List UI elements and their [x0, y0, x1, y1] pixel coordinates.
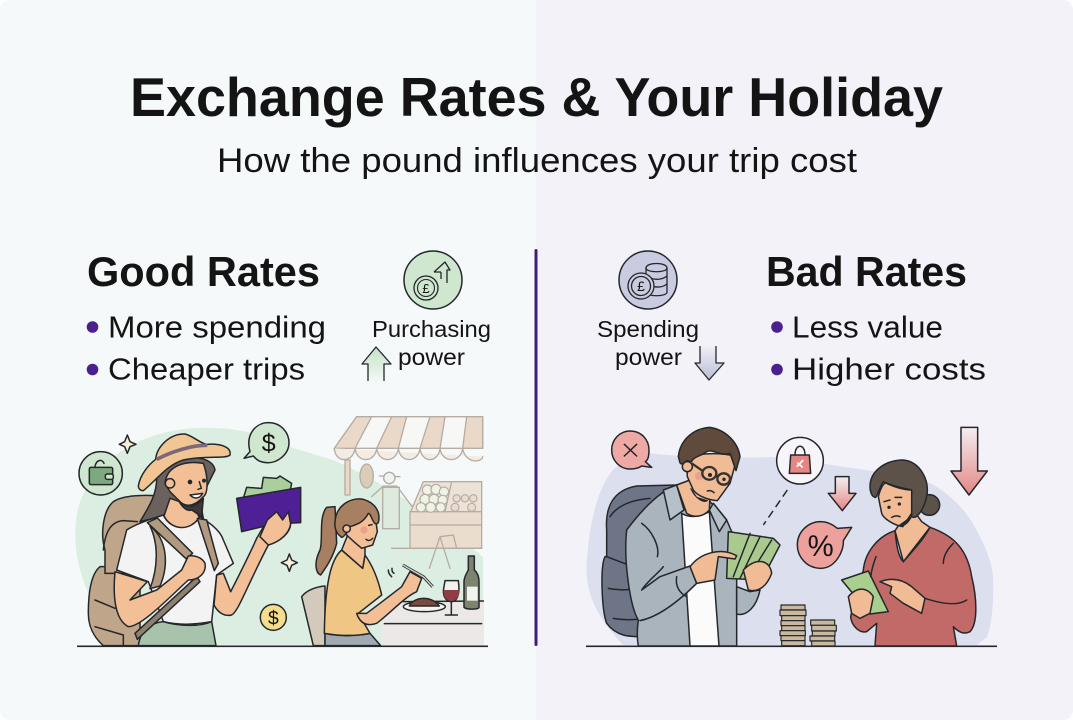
- icon: sparkles: [119, 435, 297, 571]
- glasses: [692, 463, 730, 485]
- title: Exchange Rates & Your Holiday: [130, 66, 943, 128]
- sandwich board: [429, 535, 457, 568]
- arms: [114, 512, 291, 627]
- ponytail: [316, 507, 337, 575]
- long hair: [140, 457, 215, 522]
- blouse: [324, 550, 382, 635]
- jacket: [626, 485, 737, 646]
- bullet list: good rates: [87, 310, 326, 386]
- icon: wallet badge: [79, 452, 122, 495]
- divider: [534, 249, 538, 646]
- label: spending power: power: [615, 344, 682, 370]
- background: left panel: [0, 0, 536, 720]
- neck: [895, 510, 930, 562]
- hair: [870, 460, 927, 517]
- neck and face: [677, 454, 737, 516]
- coin stacks: [780, 605, 836, 646]
- backpack: [88, 495, 157, 646]
- heading: bad rates: Bad Rates: [766, 248, 967, 295]
- arrow: small price drop: [828, 477, 856, 511]
- neck: [164, 498, 199, 528]
- bullet list: good rates: More spending: [108, 310, 326, 344]
- illustration background: blue blob: [587, 453, 993, 645]
- produce crates: [392, 482, 482, 548]
- illustration background: green blob: [75, 428, 483, 645]
- sweater: [851, 527, 976, 646]
- icon: dollar coin: $: [268, 608, 279, 629]
- hanging produce: [360, 464, 373, 488]
- face: [878, 483, 917, 527]
- icon: pound coin with rising arrow: £: [422, 281, 430, 296]
- hands: [848, 579, 925, 618]
- face: [165, 462, 207, 505]
- t-shirt: [117, 515, 233, 624]
- sun hat: [138, 434, 230, 491]
- icon: rejected speech bubble: [612, 431, 652, 469]
- arrow: purchasing power up: [362, 347, 391, 381]
- t-shirt: [682, 512, 719, 646]
- panel: bad rates: [597, 248, 986, 386]
- wine glass: [443, 581, 459, 615]
- icon: percent bubble: [797, 522, 852, 568]
- ground line: left: [77, 646, 488, 647]
- market awning: [334, 417, 483, 495]
- wine bottle: [464, 556, 479, 609]
- straps: [135, 518, 218, 639]
- bullet list: good rates: Cheaper trips: [108, 352, 305, 386]
- label: purchasing power: [372, 316, 491, 370]
- label: spending power: [597, 316, 699, 370]
- bullet list: bad rates: Less value: [792, 310, 943, 344]
- icon: dollar speech bubble: $: [262, 430, 276, 458]
- illustration: worried woman with receipts and price icons: [777, 427, 987, 646]
- icon: percent bubble: %: [808, 530, 834, 563]
- arrow: spending power down: [695, 346, 724, 380]
- ground line: right: [586, 646, 997, 647]
- hair: [678, 427, 740, 471]
- table: [382, 601, 484, 646]
- icon: dollar speech bubble: [244, 423, 289, 463]
- heading: good rates: Good Rates: [87, 248, 320, 295]
- illustration: worried man with banknotes: [602, 427, 787, 646]
- bullet list: bad rates: [771, 310, 986, 386]
- icon: pound coin with coin stack: [619, 251, 677, 309]
- arm and fork: [357, 565, 433, 625]
- sleeve crease: [871, 543, 967, 604]
- arrow: large price drop: [951, 427, 987, 495]
- banknotes: [842, 571, 888, 614]
- background: right panel: [536, 0, 1073, 720]
- plate of pasta: [403, 598, 445, 612]
- icon: dollar coin: [260, 604, 286, 630]
- label: spending power: Spending: [597, 316, 699, 342]
- label: purchasing power: power: [398, 344, 465, 370]
- illustration: market stall and diner: [302, 417, 484, 646]
- neck and face: [342, 511, 377, 568]
- illustration: happy traveller with wallet: [79, 423, 301, 646]
- chair: [302, 586, 325, 646]
- hair bun: [919, 495, 940, 515]
- banknotes: [727, 532, 780, 580]
- subtitle: How the pound influences your trip cost: [217, 142, 857, 180]
- jacket collar and arm: [640, 485, 760, 621]
- trousers: [325, 633, 381, 646]
- icon: pound coin with rising arrow: [404, 251, 462, 309]
- icon: shopping bag: [777, 437, 823, 484]
- icon: pound coin with coin stack: £: [637, 278, 645, 294]
- bullet list: bad rates: Higher costs: [792, 352, 986, 386]
- hair: [335, 499, 379, 537]
- label: purchasing power: Purchasing: [372, 316, 491, 342]
- backpack: [602, 485, 728, 637]
- hands: [690, 552, 772, 591]
- dashed connector: [763, 490, 787, 525]
- icon: purple wallet with banknotes: [237, 476, 301, 545]
- panel: good rates: [87, 248, 491, 386]
- trousers: [138, 622, 216, 646]
- market vendor: [372, 472, 412, 529]
